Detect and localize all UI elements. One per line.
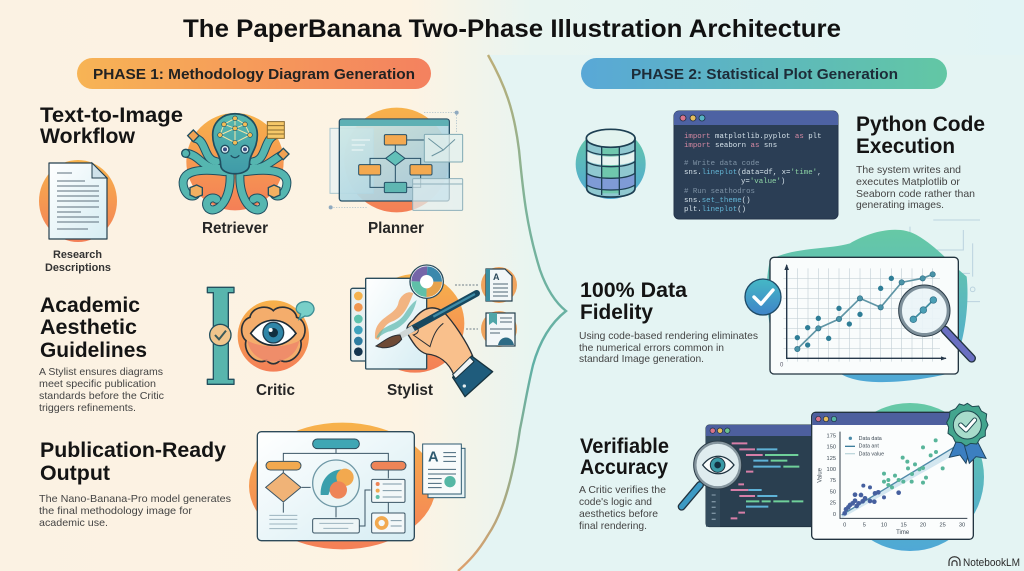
- panel: academic aesthetic guidelines: [39, 265, 517, 414]
- heading: publication-ready output: Publication-Ready: [40, 439, 226, 462]
- plot window with scatter chart: 150: [827, 445, 836, 451]
- icon: style reference document a: A: [493, 272, 500, 282]
- icon: critic brain eye: [238, 300, 314, 372]
- heading: 100% data fidelity: Fidelity: [580, 301, 653, 324]
- text: data fidelity description: standard Image generation.: [579, 353, 704, 365]
- text: stylist description: A Stylist ensures diagrams: [39, 366, 163, 378]
- heading: verifiable accuracy: Accuracy: [580, 456, 668, 479]
- label: research descriptions: Descriptions: [45, 262, 111, 274]
- diagram: methodology output card: [249, 423, 436, 549]
- heading: academic aesthetic guidelines: Aesthetic: [40, 316, 137, 339]
- right phase background: [458, 55, 1024, 571]
- text: python description: executes Matplotlib or: [856, 176, 961, 188]
- plot window with scatter chart: 0: [833, 512, 836, 518]
- text: verifiable accuracy description: final rendering.: [579, 520, 647, 532]
- plot window with scatter chart: 75: [830, 478, 836, 484]
- panel: publication-ready output: [39, 423, 465, 549]
- text: nano-banana-pro description: The Nano-Banana-Pro model generates: [39, 493, 231, 505]
- heading: verifiable accuracy: Verifiable: [580, 435, 669, 458]
- text: verifiable accuracy description: aesthetics before: [579, 508, 658, 520]
- plot window with scatter chart: 30: [959, 523, 965, 529]
- icon: check badge: [745, 279, 781, 315]
- label: planner: Planner: [368, 220, 424, 237]
- icon: database cylinder: [576, 129, 646, 199]
- panel: 100% data fidelity: [579, 220, 980, 382]
- heading: python code execution: Execution: [856, 135, 955, 158]
- icon: retriever octopus: [182, 113, 289, 210]
- code window: plt.lineplot(): [684, 206, 746, 214]
- icon: planner window: [329, 108, 463, 212]
- icon: critic scale bar: [207, 287, 234, 384]
- plot window with scatter chart: 100: [827, 467, 836, 473]
- plot window with scatter chart: 50: [830, 489, 836, 495]
- plot window with scatter chart: Data data: [859, 436, 882, 442]
- phase 2 banner: PHASE 2: Statistical Plot Generation: [631, 66, 898, 83]
- text: python description: Seaborn code rather than: [856, 188, 975, 200]
- central curved divider: [458, 55, 566, 571]
- heading: academic aesthetic guidelines: Guidelines: [40, 339, 147, 362]
- label: stylist: Stylist: [387, 382, 433, 399]
- title: The PaperBanana Two-Phase Illustration Architecture: [183, 15, 841, 43]
- phase 2 banner: [581, 58, 947, 89]
- code window: [674, 111, 838, 219]
- panel: verifiable accuracy: [579, 403, 988, 551]
- label: critic: Critic: [256, 382, 295, 399]
- text: verifiable accuracy description: code's logic and: [579, 496, 652, 508]
- icon: published paper: A: [428, 450, 439, 466]
- icon: magnifier with eye: [682, 441, 742, 507]
- text: stylist description: standards before the Critic: [39, 390, 164, 402]
- icon: style reference document a: [455, 267, 517, 329]
- text: verifiable accuracy description: A Critic verifies the: [579, 484, 666, 496]
- icon: research document: [39, 160, 117, 242]
- heading: text-to-image workflow: Text-to-Image: [40, 104, 183, 127]
- text: python description: The system writes and: [856, 164, 961, 176]
- plot window with scatter chart: Value: [818, 467, 824, 483]
- icon: award ribbon seal: [947, 403, 988, 463]
- code window: sns.set_theme(): [684, 197, 751, 205]
- text: python description: generating images.: [856, 199, 944, 211]
- plot window with scatter chart: 25: [830, 501, 836, 507]
- text: stylist description: meet specific publication: [39, 378, 156, 390]
- text: stylist description: triggers refinements.: [39, 402, 136, 414]
- code editor window: [706, 425, 819, 527]
- chart: line plot with magnifier: [767, 220, 980, 382]
- panel: text-to-image workflow: [39, 104, 463, 274]
- heading: python code execution: Python Code: [856, 113, 985, 136]
- plot window with scatter chart: 125: [827, 456, 836, 462]
- icon: published paper: [423, 444, 465, 498]
- code window: import matplotlib.pyplot as plt: [684, 133, 822, 141]
- heading: text-to-image workflow: Workflow: [40, 125, 136, 148]
- text: nano-banana-pro description: academic use.: [39, 517, 108, 529]
- heading: 100% data fidelity: 100% Data: [580, 279, 687, 302]
- code window: # Run seathodros: [684, 188, 755, 196]
- plot window with scatter chart: Data ant: [859, 444, 879, 450]
- icon: stylist painting hand: [351, 265, 493, 397]
- text: nano-banana-pro description: the final methodology image for: [39, 505, 193, 517]
- plot window with scatter chart: 10: [881, 523, 887, 529]
- phase 1 banner: [77, 58, 431, 89]
- text: data fidelity description: the numerical errors common in: [579, 342, 724, 354]
- code window: import seaborn as sns: [684, 142, 777, 150]
- code window: sns.lineplot(data=df, x='time',: [684, 169, 822, 177]
- plot window with scatter chart: Time: [896, 530, 910, 536]
- plot window with scatter chart: Data value: [859, 451, 884, 457]
- code window: # Write data code: [684, 160, 759, 168]
- code window: y='value'): [741, 178, 785, 186]
- icon: style reference document b: [481, 311, 517, 347]
- plot window with scatter chart: 25: [940, 523, 946, 529]
- label: retriever: Retriever: [202, 220, 268, 237]
- panel: python code execution: [576, 111, 985, 219]
- plot window with scatter chart: 15: [901, 523, 907, 529]
- phase 1 banner: PHASE 1: Methodology Diagram Generation: [93, 66, 415, 83]
- plot window with scatter chart: 175: [827, 434, 836, 440]
- plot window with scatter chart: 5: [863, 523, 866, 529]
- heading: academic aesthetic guidelines: Academic: [40, 294, 140, 317]
- chart: line plot with magnifier: 0: [780, 363, 784, 369]
- plot window with scatter chart: 0: [843, 523, 846, 529]
- label: research descriptions: Research: [53, 249, 102, 261]
- circle backdrop: [836, 403, 984, 551]
- plot window with scatter chart: [812, 412, 973, 539]
- text: data fidelity description: Using code-based rendering eliminates: [579, 330, 758, 342]
- plot window with scatter chart: 20: [920, 523, 926, 529]
- heading: publication-ready output: Output: [40, 462, 110, 485]
- notebooklm logo: NotebookLM: [963, 557, 1020, 569]
